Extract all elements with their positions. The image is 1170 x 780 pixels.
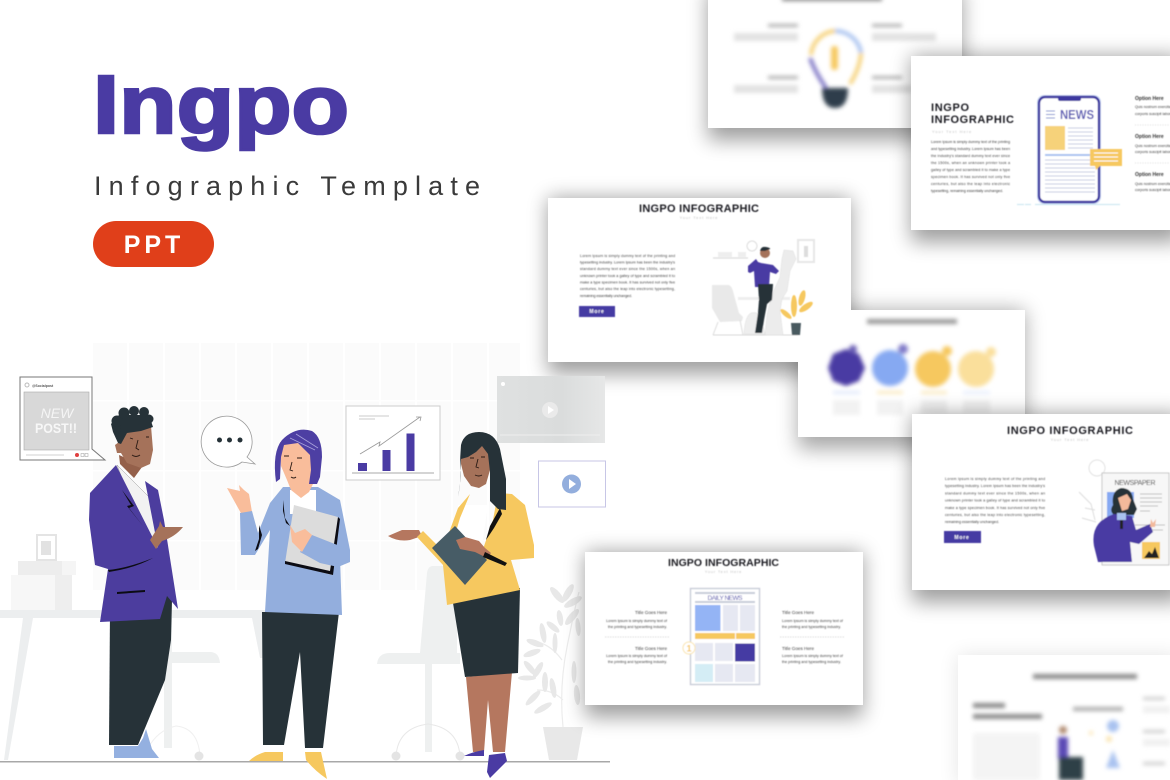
body text: the 1500s, when an unknown printer took a (931, 161, 1011, 165)
body text: typesetting industry. Lorem Ipsum has been the industry's (945, 484, 1045, 488)
speech bubble (201, 416, 255, 467)
icon: phone news: NEWS (1060, 107, 1094, 122)
person: man in purple blazer (89, 406, 183, 758)
icon: phone news (1017, 95, 1122, 204)
chart card (346, 406, 440, 480)
panel: person with receipt slide (548, 198, 851, 362)
panel: daily news slide: Your Text Here (705, 569, 742, 574)
right text items: Lorem Ipsum is simply dummy text of (782, 654, 844, 658)
person: woman in yellow blazer (388, 432, 534, 778)
panel: news phone slide (911, 56, 1170, 242)
left text items: the printing and typesetting industry. (608, 625, 667, 629)
desk and shelf items (0, 535, 270, 760)
body text (945, 477, 1045, 524)
panel: four blobs slide background (798, 310, 1025, 449)
panel: news phone slide: Your Text Here (932, 129, 972, 134)
body text (931, 140, 1011, 193)
button: More: More (589, 309, 605, 315)
subtitle: Infographic Template (94, 171, 480, 201)
left text items: Title Goes Here (635, 646, 667, 651)
options list (1135, 96, 1170, 192)
left text items: Lorem Ipsum is simply dummy text of (606, 654, 668, 658)
illustration: reporter with newspaper (1079, 460, 1169, 565)
illustration: man reading long receipt (712, 240, 814, 335)
right text items: Title Goes Here (782, 646, 814, 651)
body text: standard dummy text ever since the 1500s, when an (945, 492, 1045, 496)
right text items: Lorem Ipsum is simply dummy text of (782, 619, 844, 623)
button: More: More (954, 535, 970, 541)
body text: make a type specimen book. It has survived not only five (945, 506, 1045, 510)
body text: Lorem Ipsum is simply dummy text of the printing (931, 140, 1010, 144)
body text: make a type specimen book. It has survived not only five (580, 280, 675, 284)
badge: PPT: PPT (124, 231, 184, 259)
body text: Lorem Ipsum is simply dummy text of the printing and (945, 477, 1045, 481)
button: More (579, 306, 615, 317)
newspaper daily news: DAILY NEWS (708, 595, 743, 602)
body text: typesetting, remaining essentially unchanged. (931, 189, 1003, 193)
social post card: @Socialpost (32, 384, 54, 388)
background wall grid (93, 343, 520, 590)
four blobs slide content (828, 319, 996, 415)
panel: newspaper reporter slide (912, 414, 1170, 602)
office chair right (377, 566, 464, 760)
right text items (780, 610, 844, 664)
panel: news phone slide: INFOGRAPHIC (931, 114, 1014, 126)
newspaper daily news: 1 (686, 644, 692, 654)
body text: typesetting industry. Lorem Ipsum has been the industry's (580, 260, 675, 264)
social post card: POST!! (35, 420, 77, 436)
body text: remaining essentially unchanged. (945, 520, 999, 524)
left text items: Lorem Ipsum is simply dummy text of (606, 619, 668, 623)
plant in pot (518, 583, 583, 760)
body text: galley of type and scrambled it to make a type (931, 168, 1010, 172)
body text: standard dummy text ever since the 1500s, when an (580, 267, 675, 271)
floor line (0, 761, 610, 762)
body text: the industry's standard dummy text ever since (931, 154, 1010, 158)
social post card (20, 377, 105, 460)
title: Ingpo (93, 58, 349, 151)
options list: Option Here (1135, 96, 1164, 102)
options list: Option Here (1135, 172, 1164, 178)
newspaper daily news (683, 588, 760, 684)
body text (580, 254, 675, 298)
body text: specimen book. It has survived not only five (931, 175, 1010, 179)
body text: and typesetting industry. Lorem Ipsum has been (931, 147, 1010, 151)
office chair left (148, 618, 220, 760)
body text: unknown printer took a galley of type and scrambled it to (945, 498, 1045, 502)
right text items: the printing and typesetting industry. (782, 625, 841, 629)
illustration: reporter with newspaper: NEWSPAPER (1114, 480, 1156, 487)
heading: INGPO INFOGRAPHIC (668, 557, 779, 569)
panel: blurred seated person slide (958, 655, 1170, 780)
heading: INGPO (931, 102, 969, 114)
body text: centuries, but also the leap into electronic typesetting, (580, 287, 675, 291)
body text: unknown printer took a galley of type and scrambled it to (580, 274, 675, 278)
person: woman in light blue blazer (227, 430, 350, 779)
video thumbnail grey (497, 376, 605, 443)
left text items: the printing and typesetting industry. (608, 660, 667, 664)
left text items (605, 610, 670, 664)
body text: centuries, but also the leap into electronic (931, 182, 1010, 186)
right text items: the printing and typesetting industry. (782, 660, 841, 664)
body text: centuries, but also the leap into electronic typesetting, (945, 513, 1045, 517)
button: More (944, 531, 981, 543)
left text items: Title Goes Here (635, 610, 667, 615)
heading: INGPO INFOGRAPHIC (639, 203, 759, 215)
panel: person with receipt slide: Your Text Here (680, 215, 718, 220)
social post card: NEW (41, 405, 75, 421)
heading: INGPO INFOGRAPHIC (1007, 425, 1133, 437)
body text: remaining essentially unchanged. (580, 294, 632, 298)
panel shadow: person slide (548, 198, 851, 374)
badge: PPT (93, 221, 214, 267)
right text items: Title Goes Here (782, 610, 814, 615)
panel: blurred lightbulb slide (708, 0, 962, 140)
video card with play (538, 461, 606, 507)
panel: newspaper reporter slide: Your Text Here (1051, 437, 1089, 442)
body text: Lorem Ipsum is simply dummy text of the printing and (580, 254, 675, 258)
panel: daily news slide (585, 552, 863, 717)
options list: Option Here (1135, 134, 1164, 140)
